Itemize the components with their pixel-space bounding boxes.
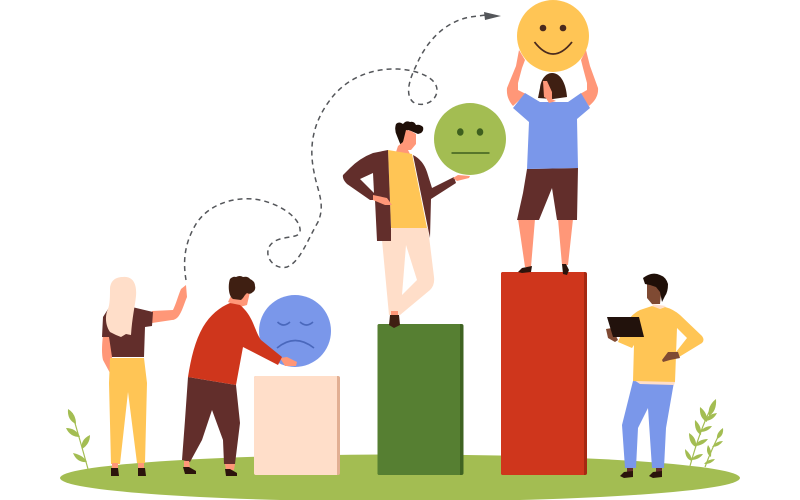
hair [643,274,668,302]
head [647,284,662,304]
jeans [622,381,674,468]
figure: man with neutral face [343,121,470,328]
pointing arm [152,285,187,323]
icon: left plant [66,409,90,469]
ground [60,454,740,500]
shoe [389,315,400,328]
hand on tablet [606,328,618,342]
arm gap [360,173,374,193]
bar: high [501,272,587,475]
hair [229,276,255,300]
hair [395,121,423,146]
pants [182,377,240,464]
shoes [518,264,569,275]
icon: sad face [259,295,331,367]
shirt [102,306,153,357]
jacket right [413,155,456,238]
left arm [102,335,113,373]
shirt [513,93,590,169]
bar: medium [378,324,464,475]
icon: right plant [685,399,723,467]
bar: low box [254,376,340,475]
hand [280,357,297,366]
ankle [391,311,398,317]
face [543,81,556,103]
ankles [112,463,144,469]
figure: woman pointing [102,277,187,476]
jacket left [343,150,391,241]
sweater [618,306,704,382]
hand left [373,195,392,205]
figure: woman holding happy face [507,50,598,275]
sweater [188,303,282,385]
hand on hip [662,352,680,362]
ankles [627,468,662,473]
icon: neutral face [434,103,506,175]
shirt hem [634,380,675,385]
icon: happy face [517,0,589,72]
shoes [111,468,146,476]
pants [382,228,434,315]
collar [652,304,666,309]
shoes [183,467,237,476]
arrow: dashed journey line [185,12,501,280]
head [396,130,416,154]
legs [518,219,573,267]
shoes [620,471,662,478]
figure: man with tablet [606,274,704,478]
arms [507,50,598,106]
shorts [517,168,578,220]
t-shirt [388,150,427,228]
ankles [184,461,235,470]
neck and head [228,285,250,307]
hand right [453,175,470,181]
arrow head [484,12,501,20]
hair [106,277,136,337]
hair [538,73,567,99]
figure: man with sad face [182,276,297,476]
pants [109,358,147,464]
leg gap [402,245,417,295]
tablet [607,317,644,337]
